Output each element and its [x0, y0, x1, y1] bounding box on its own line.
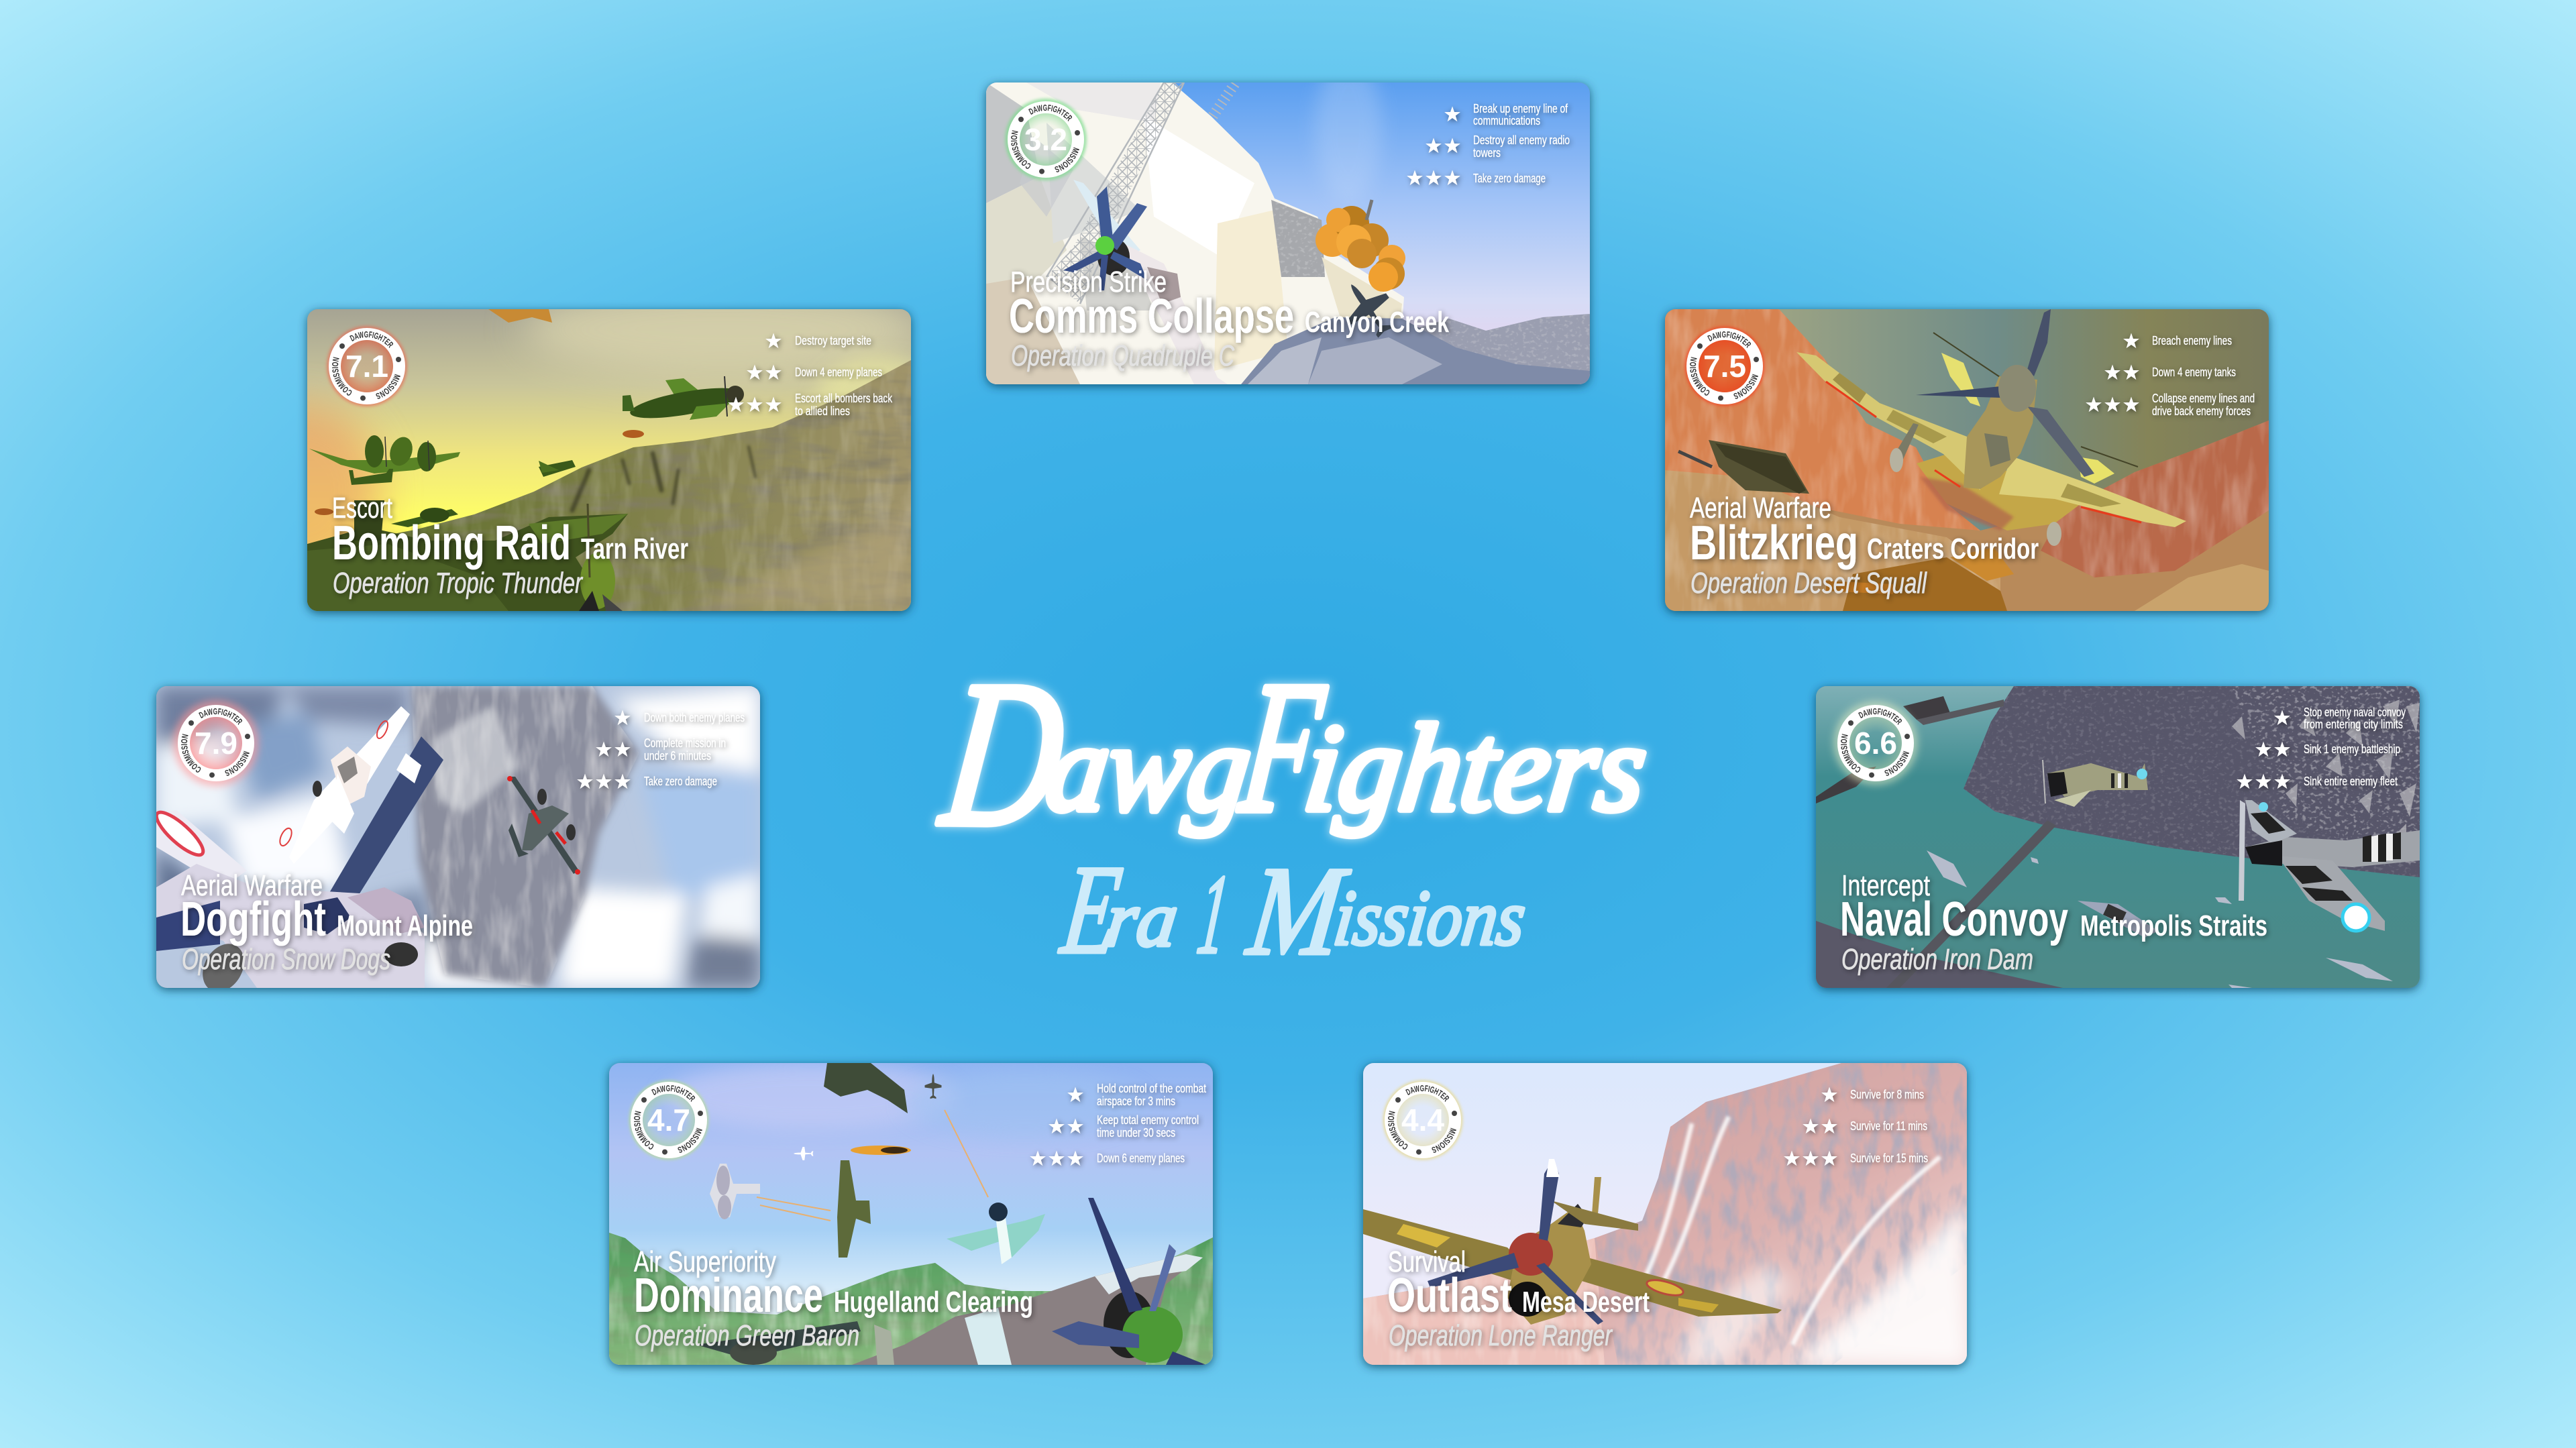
- objectives list: Break up enemy line of: [1473, 102, 1568, 115]
- badge: 4.4: DAWGFIGHTER: [1403, 1080, 1453, 1105]
- objectives list: Down both enemy planes: [644, 711, 745, 724]
- objectives list: [1407, 102, 1570, 185]
- objectives list: Destroy all enemy radio: [1473, 133, 1570, 147]
- mission heading: Metropolis Straits: [2080, 909, 2267, 942]
- badge: 3.2: [1003, 99, 1085, 178]
- scene: sunset valley with bombers: [307, 309, 911, 611]
- icon: enemy plane bottom: [696, 1321, 861, 1365]
- badge: 7.1: COMMISSION: [332, 357, 352, 396]
- scene: snowy canyon with radio towers: [986, 56, 1590, 384]
- objectives list: time under 30 secs: [1097, 1126, 1175, 1139]
- subtitle: Era 1 Missions: ra: [1102, 875, 1183, 963]
- badge: 7.9: DAWGFIGHTER: [196, 703, 246, 728]
- mission heading: Blitzkrieg: [1690, 516, 1858, 570]
- mission heading: Air Superiority: [634, 1245, 776, 1278]
- mission heading: Aerial Warfare: [181, 869, 323, 902]
- objectives list: Sink entire enemy fleet: [2304, 775, 2398, 788]
- bridge: [1886, 820, 2056, 988]
- icon: large blue wing: [151, 736, 443, 999]
- badge: 7.9: COMMISSION: [173, 730, 205, 778]
- badge: 7.9: MISSIONS: [221, 746, 255, 781]
- mission heading: Operation Tropic Thunder: [333, 567, 584, 600]
- mission heading: [180, 869, 473, 976]
- title block: [930, 639, 1661, 982]
- badge: 3.2: COMMISSION: [1011, 130, 1030, 169]
- icon: small camo fighter: [2043, 760, 2148, 807]
- objectives list: [577, 710, 745, 789]
- icon: ships: [1927, 850, 2393, 995]
- scene: pink mesa with lone fighter: [1363, 1063, 1967, 1365]
- scene: desert canyon with fighter: [1665, 309, 2269, 611]
- badge: 7.1: DAWGFIGHTER: [350, 331, 393, 348]
- badge: 7.1: 7.1: [345, 349, 388, 384]
- mission heading: Survival: [1388, 1245, 1466, 1278]
- icon: player plane: [1063, 180, 1228, 384]
- objectives list: Breach enemy lines: [2152, 334, 2232, 347]
- icon: tanks: [1678, 440, 2014, 611]
- icon: large striped fighter: [2239, 800, 2420, 931]
- panel: Outlast mission card: [1363, 1063, 1967, 1365]
- badge: 4.4: MISSIONS: [1428, 1123, 1462, 1158]
- panel: Blitzkrieg mission card: [1665, 309, 2269, 611]
- objectives list: Take zero damage: [644, 775, 717, 788]
- objectives list: Sink 1 enemy battleship: [2304, 742, 2400, 756]
- mission heading: Dogfight: [180, 893, 326, 946]
- icon: lone fighter plane: [1363, 1159, 1782, 1325]
- title: DawgFighters: ighters: [1298, 700, 1654, 837]
- badge: 6.6: COMMISSION: [1833, 730, 1865, 778]
- objectives list: to allied lines: [795, 404, 850, 418]
- mission heading: Bombing Raid: [332, 516, 571, 570]
- mission heading: Operation Green Baron: [635, 1319, 859, 1352]
- badge: 7.5: MISSIONS: [1729, 370, 1764, 404]
- mission heading: Operation Snow Dogs: [182, 943, 390, 976]
- mission heading: Craters Corridor: [1867, 533, 2039, 565]
- badge: 6.6: 6.6: [1854, 726, 1897, 761]
- mission heading: Mesa Desert: [1522, 1286, 1650, 1319]
- mission heading: Comms Collapse: [1009, 290, 1294, 343]
- objectives list: Take zero damage: [1473, 172, 1546, 185]
- objectives list: towers: [1473, 146, 1501, 160]
- panel: Dogfight mission card: [151, 686, 760, 999]
- objectives list: Hold control of the combat: [1097, 1082, 1206, 1095]
- objectives list: Collapse enemy lines and: [2152, 392, 2255, 405]
- badge: 4.7: DAWGFIGHTER: [649, 1080, 699, 1105]
- objectives list: Escort all bombers back: [795, 392, 893, 405]
- mission heading: Operation Lone Ranger: [1389, 1319, 1613, 1352]
- objectives list: under 6 minutes: [644, 749, 711, 763]
- icon: radio towers: [1046, 82, 1236, 304]
- mission heading: Operation Iron Dam: [1841, 943, 2033, 976]
- badge: 7.1: [324, 326, 406, 404]
- objectives list: airspace for 3 mins: [1097, 1095, 1175, 1108]
- subtitle: Era 1 Missions: issions: [1330, 873, 1530, 962]
- mission heading: [1009, 266, 1449, 372]
- title: DawgFighters: D: [930, 639, 1075, 869]
- objectives list: [2086, 333, 2255, 418]
- icon: escort plane: [278, 706, 410, 864]
- scene: city strait with fleet: [1816, 686, 2420, 995]
- objectives list: Stop enemy naval convoy: [2304, 706, 2406, 719]
- icon: player plane: [307, 500, 628, 611]
- objectives list: Keep total enemy control: [1097, 1113, 1199, 1127]
- scene: alpine clouds with jets: [151, 686, 760, 999]
- panel: Comms Collapse mission card: [979, 78, 1597, 393]
- mission heading: Dominance: [634, 1269, 823, 1323]
- objectives list: [728, 333, 893, 418]
- panel: Naval Convoy mission card: [1816, 686, 2420, 995]
- badge: 7.9: 7.9: [195, 726, 237, 761]
- badge: 4.4: 4.4: [1401, 1103, 1444, 1137]
- icon: helicopters: [1933, 333, 2138, 484]
- mission heading: Operation Desert Squall: [1690, 567, 1927, 600]
- badge: 3.2: DAWGFIGHTER: [1028, 105, 1072, 121]
- mission heading: Naval Convoy: [1840, 893, 2068, 946]
- title: DawgFighters: awg: [1040, 700, 1258, 837]
- objectives list: Complete mission in: [644, 736, 726, 750]
- mission heading: Tarn River: [581, 533, 688, 565]
- objectives list: Survive for 15 mins: [1850, 1152, 1928, 1165]
- badge: 7.9: [173, 703, 255, 781]
- mission heading: Outlast: [1387, 1269, 1512, 1323]
- badge: 4.7: COMMISSION: [626, 1107, 658, 1155]
- badge: 3.2: 3.2: [1024, 122, 1067, 157]
- objectives list: Down 4 enemy planes: [795, 366, 882, 379]
- badge: 7.5: 7.5: [1703, 349, 1746, 384]
- objectives list: communications: [1473, 114, 1540, 127]
- objectives list: Destroy target site: [795, 334, 871, 347]
- mission heading: [634, 1245, 1033, 1352]
- icon: bomber planes: [309, 309, 745, 527]
- mission heading: [1387, 1245, 1650, 1352]
- scene: green hills air battle: [609, 1063, 1213, 1365]
- subtitle: Era 1 Missions: M: [1240, 841, 1355, 982]
- badge: 6.6: [1833, 703, 1915, 781]
- icon: fighter squadron: [710, 1063, 1045, 1264]
- mission heading: [1840, 869, 2267, 976]
- icon: player fighter plane: [1796, 309, 2186, 546]
- mission heading: Mount Alpine: [337, 909, 473, 942]
- badge: 4.4: COMMISSION: [1380, 1107, 1412, 1155]
- objectives list: from entering city limits: [2304, 718, 2403, 731]
- mission heading: Aerial Warfare: [1690, 492, 1831, 524]
- objectives list: Survive for 11 mins: [1850, 1119, 1927, 1133]
- objectives list: [1784, 1087, 1928, 1166]
- objectives list: drive back enemy forces: [2152, 404, 2251, 418]
- objectives list: Survive for 8 mins: [1850, 1088, 1924, 1101]
- badge: 4.7: [626, 1080, 708, 1158]
- badge: 7.5: COMMISSION: [1682, 353, 1714, 401]
- mission heading: Precision Strike: [1010, 266, 1167, 298]
- mission heading: [332, 492, 688, 600]
- icon: player plane: [852, 1198, 1206, 1365]
- subtitle: Era 1 Missions: 1: [1192, 851, 1234, 977]
- mission heading: Intercept: [1841, 869, 1930, 902]
- badge: 4.4: [1380, 1080, 1462, 1158]
- panel: Bombing Raid mission card: [301, 304, 918, 620]
- objectives list: Down 6 enemy planes: [1097, 1152, 1185, 1165]
- badge: 7.5: DAWGFIGHTER: [1705, 326, 1755, 351]
- badge: 7.1: MISSIONS: [376, 374, 400, 399]
- icon: enemy plane: [1349, 284, 1391, 338]
- mission heading: [1690, 492, 2039, 600]
- objectives list: [1030, 1082, 1206, 1166]
- badge: 6.6: DAWGFIGHTER: [1856, 703, 1906, 728]
- mission heading: Hugelland Clearing: [834, 1286, 1033, 1319]
- badge: 6.6: MISSIONS: [1880, 746, 1915, 781]
- mission heading: Escort: [332, 492, 392, 524]
- icon: explosion: [1316, 200, 1405, 292]
- badge: 3.2: MISSIONS: [1055, 148, 1079, 172]
- panel: Dominance mission card: [609, 1063, 1213, 1365]
- badge: 4.7: 4.7: [647, 1103, 690, 1137]
- mission heading: Operation Quadruple C: [1011, 339, 1235, 372]
- icon: enemy twin-engine plane: [507, 776, 580, 875]
- title: DawgFighters: F: [1231, 643, 1334, 851]
- objectives list: [2237, 706, 2406, 789]
- badge: 4.7: MISSIONS: [674, 1123, 708, 1158]
- objectives list: Down 4 enemy tanks: [2152, 366, 2236, 379]
- badge: 7.5: [1682, 326, 1764, 404]
- subtitle: Era 1 Missions: E: [1055, 840, 1128, 981]
- mission heading: Canyon Creek: [1305, 306, 1449, 339]
